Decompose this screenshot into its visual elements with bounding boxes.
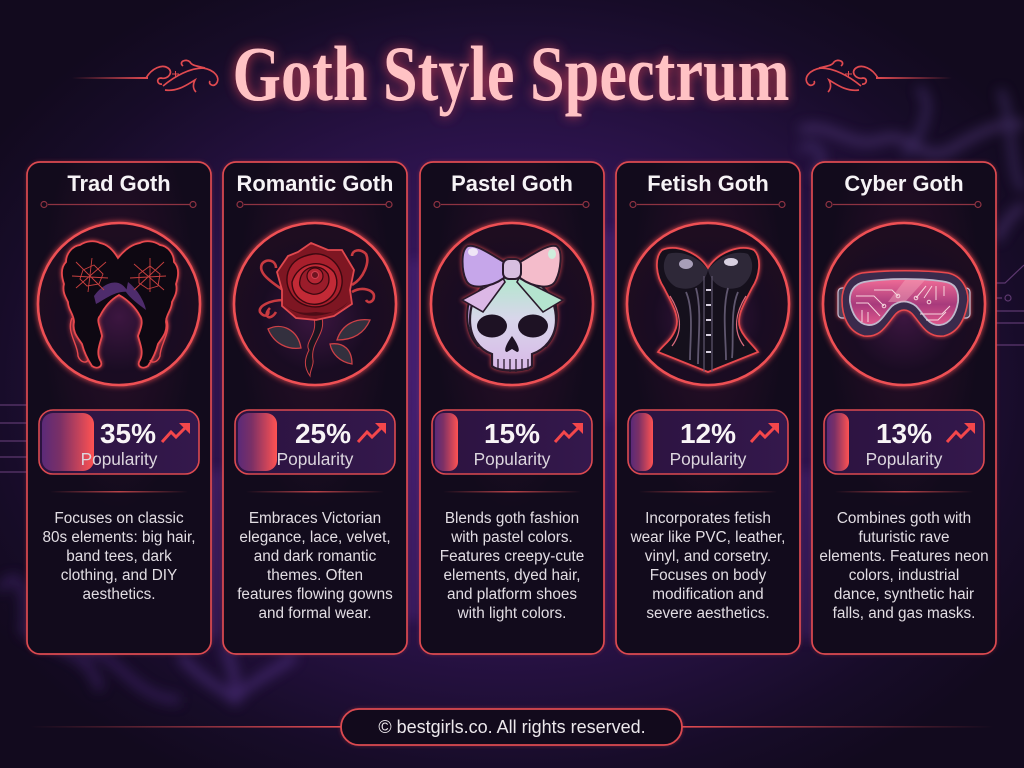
description: elements, dyed hair,	[444, 567, 580, 584]
description: wear like PVC, leather,	[630, 529, 785, 546]
percentage: 15%	[484, 418, 540, 449]
description: Focuses on classic	[54, 510, 184, 527]
description: band tees, dark	[66, 548, 172, 565]
icon: skull with bow	[431, 223, 593, 385]
popularity meter	[39, 410, 199, 474]
label: Popularity	[866, 449, 943, 469]
description: Blends goth fashion	[445, 510, 579, 527]
description: and platform shoes	[447, 586, 577, 603]
description: Features creepy-cute	[440, 548, 584, 565]
icon: trend arrow	[555, 423, 583, 442]
panel: Cyber Goth	[812, 162, 996, 654]
popularity meter	[824, 410, 984, 474]
right flourish	[806, 60, 952, 92]
panel: Romantic Goth	[223, 162, 407, 654]
panel: Fetish Goth	[616, 162, 800, 654]
description: Incorporates fetish	[645, 510, 771, 527]
description: and dark romantic	[254, 548, 377, 565]
percentage: 35%	[100, 418, 156, 449]
progress fill	[827, 413, 849, 471]
description: Combines goth with	[837, 510, 971, 527]
icon: corset	[627, 223, 789, 385]
progress fill	[435, 413, 458, 471]
label: Popularity	[474, 449, 551, 469]
description: dance, synthetic hair	[834, 586, 974, 603]
popularity meter	[628, 410, 788, 474]
heading divider	[826, 202, 981, 208]
icon: rose	[234, 223, 396, 385]
icon: trend arrow	[751, 423, 779, 442]
copyright: © bestgirls.co. All rights reserved.	[378, 717, 646, 737]
description: elegance, lace, velvet,	[239, 529, 391, 546]
description: and formal wear.	[258, 605, 372, 622]
heading divider	[237, 202, 392, 208]
percentage: 12%	[680, 418, 736, 449]
description: Focuses on body	[650, 567, 767, 584]
popularity meter	[432, 410, 592, 474]
percentage: 13%	[876, 418, 932, 449]
description: with pastel colors.	[450, 529, 573, 546]
description: features flowing gowns	[237, 586, 393, 603]
description: with light colors.	[457, 605, 566, 622]
panel: Pastel Goth	[420, 162, 604, 654]
description: aesthetics.	[82, 586, 156, 603]
heading: Fetish Goth	[647, 171, 769, 196]
progress fill	[42, 413, 94, 471]
description: modification and	[652, 586, 764, 603]
heading divider	[630, 202, 785, 208]
label: Popularity	[277, 449, 354, 469]
description: colors, industrial	[849, 567, 959, 584]
description: 80s elements: big hair,	[42, 529, 196, 546]
icon: trend arrow	[358, 423, 386, 442]
icon: trend arrow	[162, 423, 190, 442]
panel: Trad Goth	[27, 162, 211, 654]
left flourish	[72, 60, 218, 92]
description: falls, and gas masks.	[833, 605, 975, 622]
description: themes. Often	[267, 567, 363, 584]
description: futuristic rave	[859, 529, 949, 546]
heading divider	[434, 202, 589, 208]
footer	[30, 709, 994, 745]
progress fill	[238, 413, 277, 471]
description: severe aesthetics.	[646, 605, 770, 622]
description: elements. Features neon	[819, 548, 989, 565]
heading divider	[41, 202, 196, 208]
heading: Romantic Goth	[237, 171, 393, 196]
description: vinyl, and corsetry.	[645, 548, 771, 565]
description: clothing, and DIY	[61, 567, 177, 584]
progress fill	[631, 413, 653, 471]
label: Popularity	[81, 449, 158, 469]
icon: spiderweb hair	[38, 223, 200, 385]
heading: Trad Goth	[67, 171, 171, 196]
label: Popularity	[670, 449, 747, 469]
icon: cyber goggles	[823, 223, 985, 385]
title: Goth Style Spectrum	[232, 30, 790, 117]
heading: Pastel Goth	[451, 171, 573, 196]
icon: trend arrow	[947, 423, 975, 442]
heading: Cyber Goth	[844, 171, 964, 196]
popularity meter	[235, 410, 395, 474]
title text: Goth Style Spectrum	[232, 30, 790, 117]
percentage: 25%	[295, 418, 351, 449]
description: Embraces Victorian	[249, 510, 381, 527]
